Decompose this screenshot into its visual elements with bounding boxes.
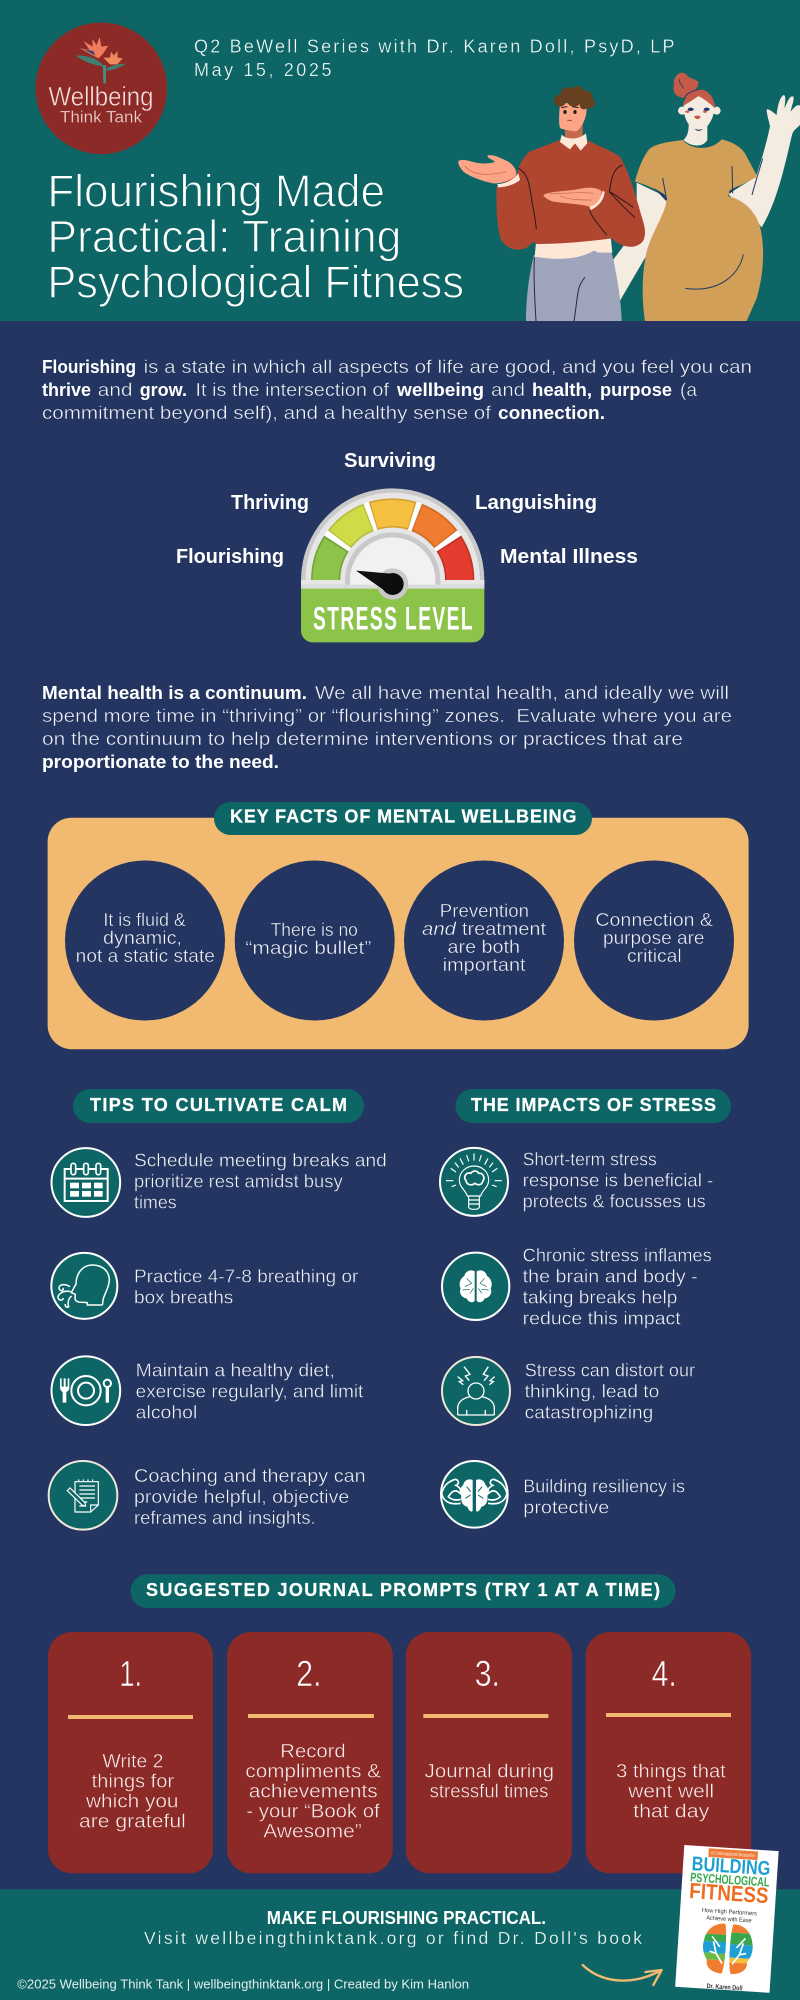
book cover: PSYCHOLOGICAL <box>690 1870 770 1890</box>
fact: connection and purpose: critical <box>627 946 682 966</box>
tip: diet and exercise <box>51 1356 363 1425</box>
book cover: BUILDING <box>691 1853 771 1880</box>
tip: schedule breaks <box>51 1148 387 1217</box>
man jeans <box>526 248 622 321</box>
tip: schedule breaks: times <box>134 1193 177 1213</box>
prompt card 2: compliments & <box>245 1761 381 1782</box>
impact: chronic stress: Chronic stress inflames <box>523 1246 712 1266</box>
prompt card 4: went well <box>627 1781 714 1802</box>
impact: distorted thinking: catastrophizing <box>525 1403 653 1423</box>
fact: fluid and dynamic: dynamic, <box>103 928 182 948</box>
tip: diet and exercise: exercise regularly, and limit <box>136 1382 363 1402</box>
prompt card 2: achievements <box>249 1781 378 1802</box>
fact: connection and purpose: Connection & <box>595 910 713 930</box>
prompt card 3: 3. <box>475 1653 500 1694</box>
footer band <box>0 1889 800 2000</box>
gauge labels: Mental Illness <box>500 546 638 568</box>
gauge labels: Thriving <box>231 492 309 514</box>
arrow to book <box>583 1965 662 1985</box>
intro paragraph: It is the intersection of <box>196 380 390 400</box>
tip: diet and exercise: alcohol <box>136 1403 197 1423</box>
impact: chronic stress: reduce this impact <box>523 1309 681 1329</box>
fact: prevention and treatment: important <box>443 955 526 975</box>
footer call to action: MAKE FLOURISHING PRACTICAL. <box>267 1907 546 1928</box>
woman arm right <box>728 95 800 227</box>
intro paragraph: thrive <box>42 380 91 400</box>
heading: the impacts of stress: THE IMPACTS OF STRESS <box>471 1095 716 1115</box>
tip: coaching and therapy <box>49 1461 366 1530</box>
prompt card 3 <box>406 1632 572 1873</box>
fact: no magic bullet: “magic bullet” <box>245 938 371 958</box>
prompt card 3: stressful times <box>430 1781 548 1802</box>
stress gauge: STRESS LEVEL <box>313 600 473 637</box>
man hair <box>554 86 595 109</box>
logo: Wellbeing Think Tank: Think Tank <box>60 108 142 126</box>
man neck and collar <box>565 123 583 140</box>
dress <box>635 139 763 321</box>
gauge labels <box>176 450 638 568</box>
prompt card 1: things for <box>92 1771 175 1792</box>
intro paragraph: grow. <box>140 380 187 400</box>
tip: schedule breaks: prioritize rest amidst busy <box>134 1172 343 1192</box>
continuum paragraph: spend more time in “thriving” or “flourishing” zones. Evaluate where you are <box>42 706 732 726</box>
title: Practical: Training <box>47 211 401 262</box>
tip: breathing: Practice 4-7-8 breathing or <box>134 1267 358 1287</box>
header band <box>0 0 800 321</box>
intro paragraph: health, <box>532 380 592 400</box>
impact: distorted thinking: Stress can distort our <box>525 1361 695 1381</box>
impact: chronic stress: the brain and body - <box>523 1267 698 1287</box>
tip: breathing: box breaths <box>134 1288 233 1308</box>
prompt card 4: 3 things that <box>616 1761 727 1782</box>
impact: short-term stress: protects & focusses us <box>523 1192 706 1212</box>
intro paragraph: wellbeing <box>396 380 484 400</box>
prompt card 4 <box>586 1632 751 1873</box>
icon: notes and pencil <box>49 1461 117 1530</box>
logo: Wellbeing Think Tank <box>36 22 167 154</box>
prompt card 2: 2. <box>296 1653 322 1694</box>
impact: chronic stress: taking breaks help <box>523 1288 677 1308</box>
prompt card 2: Awesome” <box>263 1821 362 1842</box>
heading: journal prompts <box>130 1574 676 1608</box>
intro paragraph: and <box>491 380 525 400</box>
book cover: How High Performers <box>702 1908 757 1917</box>
heading: key facts <box>214 802 592 835</box>
man shirt hem <box>535 237 612 259</box>
prompt card 1: are grateful <box>79 1811 186 1832</box>
fact: prevention and treatment: treatment <box>462 919 546 939</box>
stress gauge <box>301 488 484 642</box>
man sweater <box>496 139 645 250</box>
series and date line: Q2 BeWell Series with Dr. Karen Doll, PsyD, LP <box>194 37 674 57</box>
impact: distorted thinking: thinking, lead to <box>525 1382 659 1402</box>
gauge labels: Flourishing <box>176 546 284 568</box>
impact: short-term stress: response is beneficial - <box>523 1171 713 1191</box>
illustration: man and woman <box>458 73 800 321</box>
impact: chronic stress <box>442 1246 712 1329</box>
prompt card 4: that day <box>633 1801 710 1822</box>
title <box>47 166 464 308</box>
intro paragraph: and <box>98 380 133 400</box>
fact: prevention and treatment: Prevention <box>440 901 529 921</box>
book cover: #1 International Bestseller <box>711 1850 756 1859</box>
intro paragraph: connection. <box>498 403 605 423</box>
gauge labels: Languishing <box>475 492 597 514</box>
icon: plate and cutlery <box>51 1356 120 1425</box>
prompt card 1: Write 2 <box>102 1751 164 1772</box>
man hands <box>458 155 516 183</box>
title: Psychological Fitness <box>47 257 464 308</box>
continuum paragraph: proportionate to the need. <box>42 752 279 772</box>
heading: tips to cultivate calm <box>73 1089 364 1123</box>
copyright line: ©2025 Wellbeing Think Tank | wellbeingthinktank.org | Created by Kim Hanlon <box>17 1976 469 1991</box>
icon: head breathing <box>51 1253 117 1319</box>
book cover: Achieve with Ease <box>706 1916 752 1925</box>
prompt card 2: Record <box>280 1741 346 1762</box>
fact: no magic bullet: There is no <box>271 920 358 940</box>
prompt card 1 <box>48 1632 213 1873</box>
impact: building resiliency <box>441 1461 685 1528</box>
fact: fluid and dynamic <box>65 860 225 1020</box>
fact: no magic bullet <box>235 860 395 1020</box>
panel: key facts <box>48 802 749 1049</box>
intro paragraph: Flourishing <box>42 357 136 377</box>
man head <box>559 103 587 131</box>
intro paragraph: (a <box>680 380 698 400</box>
fact: fluid and dynamic: It is fluid & <box>103 910 186 930</box>
intro paragraph <box>42 357 752 423</box>
fact: prevention and treatment <box>404 860 564 1020</box>
gauge labels: Surviving <box>344 450 436 472</box>
tip: diet and exercise: Maintain a healthy diet, <box>136 1361 335 1381</box>
series and date line <box>194 37 674 80</box>
woman arm left <box>613 183 667 301</box>
impact: building resiliency: protective <box>523 1498 609 1518</box>
man cuffs <box>497 173 520 187</box>
heading: journal prompts: SUGGESTED JOURNAL PROMPTS (TRY 1 AT A TIME) <box>146 1580 660 1600</box>
icon: brain light bulb <box>440 1148 508 1216</box>
icon: brain <box>442 1253 509 1320</box>
fact: fluid and dynamic: not a static state <box>76 946 215 966</box>
prompt card 1: which you <box>85 1791 178 1812</box>
heading: tips to cultivate calm: TIPS TO CULTIVATE CALM <box>90 1095 347 1115</box>
tip: coaching and therapy: Coaching and therapy can <box>134 1466 366 1486</box>
book cover: FITNESS <box>689 1878 769 1908</box>
fact: connection and purpose <box>574 860 734 1020</box>
icon: stressed person <box>442 1357 510 1425</box>
footer call to action <box>144 1907 642 1948</box>
brain graphic <box>703 1924 753 1974</box>
fact: prevention and treatment: are both <box>448 937 520 957</box>
continuum paragraph: We all have mental health, and ideally we will <box>315 683 729 703</box>
continuum paragraph <box>42 683 732 772</box>
intro paragraph: purpose <box>600 380 672 400</box>
series and date line: May 15, 2025 <box>194 60 332 80</box>
continuum paragraph: Mental health is a continuum. <box>42 683 307 703</box>
fact: connection and purpose: purpose are <box>603 928 704 948</box>
heading: key facts: KEY FACTS OF MENTAL WELLBEING <box>230 807 576 827</box>
tip: schedule breaks: Schedule meeting breaks and <box>134 1151 387 1171</box>
prompt card 2 <box>227 1632 393 1873</box>
icon: bird of paradise flower <box>76 37 126 83</box>
icon: muscular brain <box>441 1461 508 1528</box>
prompt card 1: 1. <box>119 1653 142 1694</box>
logo: Wellbeing Think Tank: Wellbeing <box>48 82 154 112</box>
title: Flourishing Made <box>47 166 385 217</box>
book cover <box>675 1845 779 1994</box>
tip: coaching and therapy: provide helpful, objective <box>134 1487 349 1507</box>
footer call to action: Visit wellbeingthinktank.org or find Dr. Doll's book <box>144 1928 642 1948</box>
intro paragraph: commitment beyond self), and a healthy sense of <box>42 403 492 423</box>
prompt card 3: Journal during <box>425 1761 554 1782</box>
fact: prevention and treatment: and <box>422 919 457 939</box>
intro paragraph: is a state in which all aspects of life are good, and you feel you can <box>144 357 752 377</box>
woman neck and head <box>683 125 707 145</box>
impact: building resiliency: Building resiliency is <box>523 1477 685 1497</box>
impact: distorted thinking <box>442 1357 695 1425</box>
continuum paragraph: on the continuum to help determine interventions or practices that are <box>42 729 683 749</box>
icon: calendar <box>51 1148 120 1217</box>
heading: the impacts of stress <box>456 1089 731 1123</box>
tip: breathing <box>51 1253 358 1319</box>
prompt card 4: 4. <box>652 1653 677 1694</box>
book cover: Dr. Karen Doll <box>706 1983 743 1992</box>
impact: short-term stress <box>440 1148 713 1216</box>
impact: short-term stress: Short-term stress <box>523 1150 657 1170</box>
tip: coaching and therapy: reframes and insights. <box>134 1508 316 1528</box>
prompt card 2: - your “Book of <box>246 1801 380 1822</box>
